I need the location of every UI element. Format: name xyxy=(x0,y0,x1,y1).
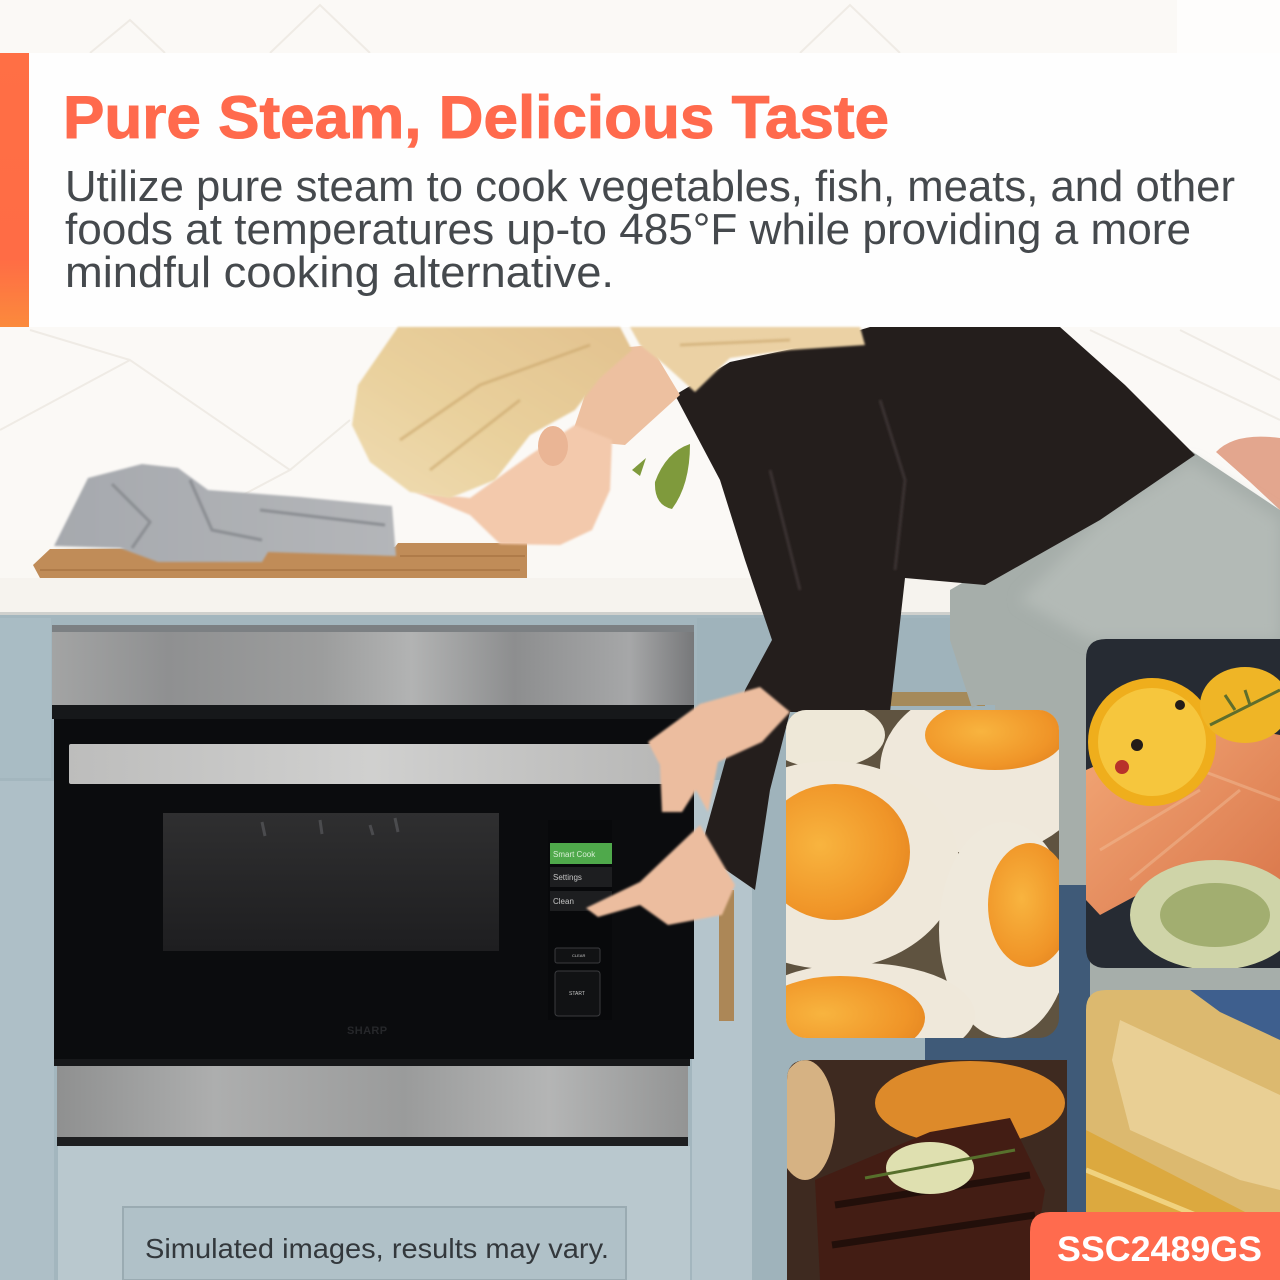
ponytail xyxy=(630,327,865,392)
control panel: START xyxy=(569,991,585,997)
body text: foods at temperatures up-to 485°F while providing a more xyxy=(65,205,1191,254)
header panel xyxy=(0,53,1280,327)
photo: salmon xyxy=(1086,639,1280,970)
control panel xyxy=(548,820,612,1020)
brand: SHARP xyxy=(347,1025,388,1037)
disclaimer: Simulated images, results may vary. xyxy=(145,1233,609,1264)
title: Pure Steam, Delicious Taste xyxy=(63,84,889,151)
photo: tamale xyxy=(1086,990,1280,1212)
apron xyxy=(950,450,1280,1000)
plant leaf xyxy=(632,444,690,509)
cabinet handle xyxy=(719,890,734,1021)
control panel: CLEAR xyxy=(572,953,585,958)
body text: Utilize pure steam to cook vegetables, fish, meats, and other xyxy=(65,162,1235,211)
upper hand xyxy=(648,687,790,812)
neck xyxy=(570,345,680,445)
oven xyxy=(52,625,694,1146)
kitchen background wall xyxy=(0,0,1280,620)
jeans xyxy=(925,880,1280,1280)
ear xyxy=(538,426,568,466)
window xyxy=(163,813,499,951)
control panel: Settings xyxy=(553,873,582,882)
hair xyxy=(352,327,632,498)
door handle xyxy=(69,744,676,784)
accent bar xyxy=(0,53,29,327)
face xyxy=(415,425,612,545)
control panel: Smart Cook xyxy=(553,850,596,859)
pointing hand xyxy=(586,825,735,925)
control panel: Clean xyxy=(553,897,574,906)
torso and arm xyxy=(675,327,1195,890)
bottom steel panel xyxy=(54,1059,690,1066)
photo: steak xyxy=(775,1060,1067,1280)
pink vase xyxy=(1216,437,1280,510)
model badge xyxy=(1030,1212,1280,1280)
oven door xyxy=(54,719,694,1059)
countertop xyxy=(0,540,960,615)
cabinets xyxy=(0,615,1000,1280)
body text xyxy=(65,162,1235,297)
body text: mindful cooking alternative. xyxy=(65,248,614,297)
top steel panel xyxy=(52,632,694,705)
cutting board with cloth xyxy=(33,464,527,578)
model badge: SSC2489GS xyxy=(1057,1229,1262,1269)
woman xyxy=(352,327,1280,1280)
photo: eggs xyxy=(786,710,1059,1038)
